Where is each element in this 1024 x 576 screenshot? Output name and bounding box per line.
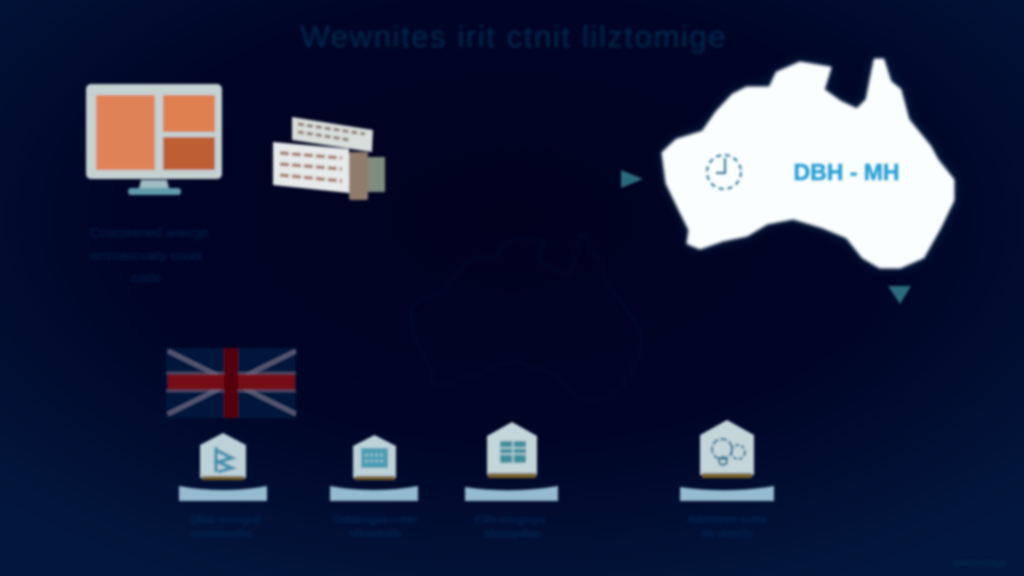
text block: badge 4 caption: Adstmeee cnets	[688, 514, 767, 526]
badge 3	[465, 422, 558, 501]
text block: badge 3 caption: Cilts ceegrops	[475, 514, 545, 526]
badge 4	[680, 420, 774, 501]
text block: badge 2 caption	[333, 514, 418, 540]
heading bar 3	[465, 486, 558, 501]
heading bar 4	[680, 486, 774, 501]
text block: monitor caption: ommascvaity cooor	[91, 248, 204, 263]
faint map outline in center	[410, 235, 642, 401]
text block: badge 3 caption	[475, 514, 545, 540]
text block: badge 1 caption	[189, 514, 261, 540]
text block: monitor caption: cocle	[131, 270, 161, 285]
text block: badge 2 caption: Ontatrogeo cntec	[333, 514, 418, 526]
heading bar 2	[330, 486, 418, 501]
text block: monitor caption	[90, 225, 208, 285]
icon: badge 3 symbol	[500, 441, 526, 466]
arrow: down below map	[888, 286, 911, 304]
icon: badge 2 symbol	[361, 448, 388, 468]
text block: badge 2 caption: oficoveails	[349, 528, 401, 540]
text block: badge 4 caption: oic dooctiy	[701, 528, 753, 540]
title: Wewnites irit ctnit lilztomige	[300, 19, 726, 54]
text block: badge 1 caption: Cilsis cecegrat	[189, 514, 261, 526]
heading bar 1	[179, 486, 267, 501]
icon: clouds	[712, 439, 745, 465]
icon: badge 1 symbol	[216, 447, 232, 472]
badge 2	[330, 435, 418, 501]
text: map value: DBH - MH	[793, 159, 900, 185]
icon: stacked documents	[273, 117, 385, 200]
text block: monitor caption: Ccsezeened anecge	[90, 225, 208, 240]
text block: badge 3 caption: ofmospdtas	[484, 528, 541, 540]
icon: desktop monitor	[86, 84, 222, 195]
icon: union flag	[166, 348, 296, 418]
arrow: right pointing to map	[621, 170, 643, 188]
icon: clock	[707, 155, 741, 189]
map: Australia	[663, 60, 953, 267]
text block: badge 1 caption: ousdeovellia	[190, 528, 252, 540]
badge 1	[179, 433, 267, 501]
text block: badge 4 caption	[688, 514, 767, 540]
footer note: wmiorotiags	[952, 558, 1007, 569]
